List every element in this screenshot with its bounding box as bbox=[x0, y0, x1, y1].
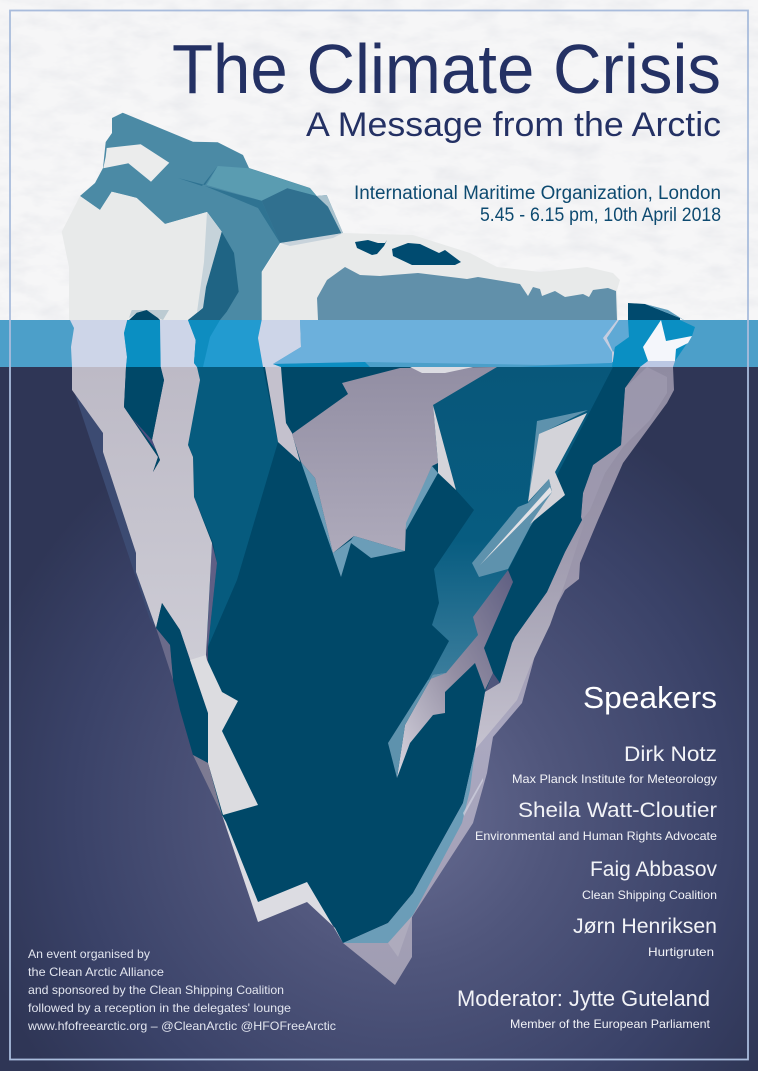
title: The Climate Crisis bbox=[172, 30, 721, 108]
white strip by centre bbox=[265, 367, 300, 462]
slot top pale bbox=[129, 310, 169, 320]
teal ice cap bbox=[80, 113, 343, 320]
organiser note: followed by a reception in the delegates' lounge bbox=[28, 1001, 291, 1015]
blue edge of lilac shard bbox=[388, 673, 446, 778]
bright blue berg bbox=[612, 320, 695, 367]
speaker: Faig Abbasov bbox=[582, 858, 717, 902]
moderator: Member of the European Parliament bbox=[510, 1017, 711, 1031]
blue slivers under centre bbox=[301, 462, 405, 577]
mid blue panel bbox=[607, 320, 629, 352]
dark slivers bbox=[178, 166, 218, 186]
speaker: Sheila Watt-Cloutier: Sheila Watt-Cloutier bbox=[518, 799, 717, 822]
speaker: Jørn Henriksen: Hurtigruten bbox=[648, 945, 714, 959]
background: snow bbox=[0, 0, 758, 322]
white shard bbox=[528, 413, 587, 524]
tip shade bbox=[388, 915, 413, 957]
dark teal rock bbox=[262, 188, 342, 243]
speaker: Jørn Henriksen bbox=[573, 915, 717, 959]
bright blue slot bbox=[124, 320, 161, 367]
iceberg above water bbox=[62, 113, 695, 327]
blue strip bbox=[273, 362, 370, 367]
speakers heading: Speakers bbox=[583, 680, 717, 715]
pale rock edge bbox=[317, 195, 343, 234]
speaker: Faig Abbasov: Clean Shipping Coalition bbox=[582, 888, 717, 902]
right lobe light band bbox=[473, 520, 584, 752]
rock shadow sliver bbox=[205, 186, 280, 243]
purple sliver bbox=[207, 543, 217, 647]
background: deep sea bbox=[0, 360, 758, 1071]
speaker: Sheila Watt-Cloutier: Environmental and Human Rights Advocate bbox=[475, 829, 717, 843]
organiser note: An event organised by bbox=[28, 947, 150, 961]
right lobe bbox=[343, 367, 674, 985]
white sliver under water line bbox=[410, 367, 473, 373]
white column 2 bbox=[160, 320, 197, 367]
shelf shadow bbox=[280, 233, 343, 246]
snow patch on cap bbox=[103, 144, 169, 182]
main dark ice bbox=[126, 367, 640, 943]
speaker: Dirk Notz: Max Planck Institute for Meteorology bbox=[512, 772, 717, 786]
water band bbox=[0, 320, 758, 367]
blue strip right bbox=[520, 363, 613, 367]
moderator bbox=[457, 986, 711, 1031]
slot purple edge bbox=[132, 418, 160, 460]
light teal rock bbox=[207, 166, 317, 201]
organiser note: and sponsored by the Clean Shipping Coalition bbox=[28, 983, 284, 997]
hole in ice 1 bbox=[355, 240, 387, 255]
blue column shade bbox=[188, 320, 220, 367]
right berg top pale bbox=[645, 304, 695, 327]
blue column bbox=[188, 320, 263, 367]
dark teal crevice bbox=[188, 232, 239, 320]
speaker: Jørn Henriksen: Jørn Henriksen bbox=[573, 915, 717, 938]
iceberg inside water band bbox=[70, 320, 695, 367]
white right ice shelf bbox=[262, 233, 620, 320]
white column 3 bbox=[258, 320, 301, 367]
pale base bbox=[640, 361, 675, 367]
speaker: Dirk Notz bbox=[512, 743, 717, 786]
lilac shard bbox=[397, 570, 513, 778]
centre grey block bbox=[292, 367, 497, 553]
blue sliver right of centre bbox=[405, 466, 438, 530]
moderator: Moderator: Jytte Guteland bbox=[457, 986, 710, 1011]
mid teal face bbox=[428, 367, 613, 680]
venue: International Maritime Organization, London bbox=[354, 183, 721, 204]
pale shadow on left face bbox=[197, 212, 222, 312]
white left ice face bbox=[62, 192, 222, 320]
white sliver bbox=[480, 487, 552, 565]
organiser note: the Clean Arctic Alliance bbox=[28, 965, 164, 979]
organiser note bbox=[27, 947, 336, 1033]
speaker: Dirk Notz: Dirk Notz bbox=[624, 743, 717, 766]
faint white line bbox=[463, 778, 483, 816]
organiser note: www.hfofreearctic.org – @CleanArctic @HFOFreeArctic bbox=[27, 1019, 336, 1033]
faint edge shadow bbox=[156, 628, 173, 680]
right berg top dark bbox=[628, 303, 680, 320]
pale blue strip along base bbox=[343, 750, 475, 943]
light blue cliff reflection bbox=[273, 320, 617, 365]
hole in ice 2 bbox=[392, 243, 461, 265]
small dark wedge bbox=[156, 603, 208, 763]
slot top dark bbox=[129, 310, 160, 320]
white wedge bbox=[433, 405, 456, 490]
lower white ice bbox=[190, 655, 258, 815]
iceberg below water bbox=[72, 367, 674, 985]
grey edge sliver bbox=[193, 755, 222, 815]
white star bbox=[643, 320, 692, 361]
date and time: 5.45 - 6.15 pm, 10th April 2018 bbox=[480, 205, 721, 226]
left slot dark bbox=[124, 367, 164, 472]
speaker: Sheila Watt-Cloutier bbox=[475, 799, 717, 843]
left faint band bbox=[72, 385, 156, 628]
mid teal left column bbox=[188, 367, 278, 647]
pale edge bbox=[603, 320, 620, 362]
blue shard bbox=[472, 410, 588, 577]
bottom white strip bbox=[222, 815, 343, 943]
right lobe inner shade bbox=[581, 367, 667, 520]
speaker: Faig Abbasov: Faig Abbasov bbox=[590, 858, 717, 881]
subtitle: A Message from the Arctic bbox=[306, 106, 721, 144]
blue-grey cliff bbox=[317, 267, 617, 320]
left white body bbox=[72, 367, 212, 680]
white column 1 bbox=[70, 320, 127, 367]
